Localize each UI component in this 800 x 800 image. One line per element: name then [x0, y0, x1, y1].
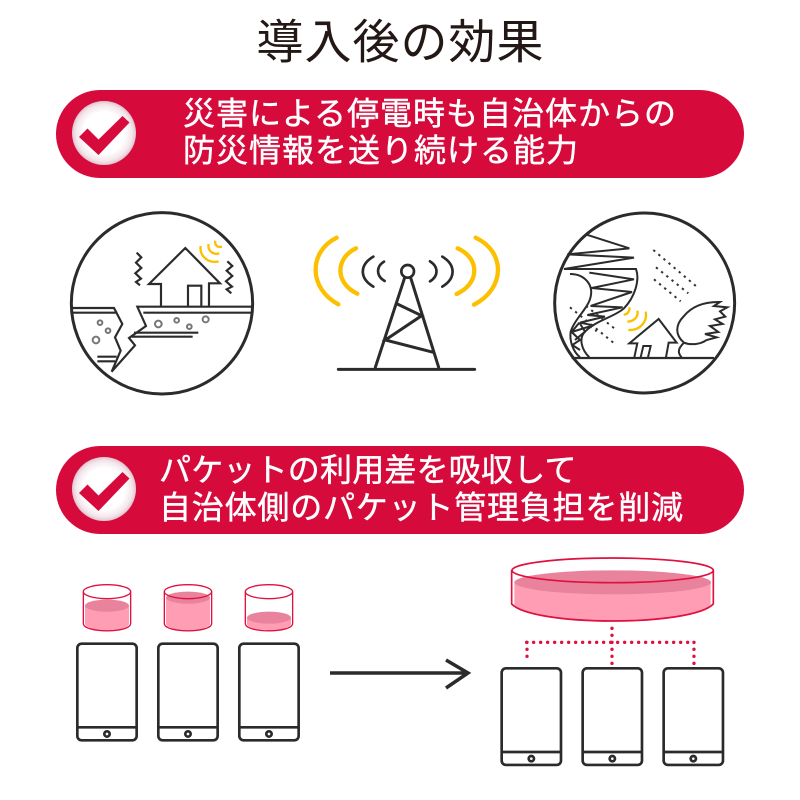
banner text: パケットの利用差を吸収して [159, 452, 577, 488]
data cylinder 2 [164, 585, 212, 631]
banner: disaster resilience [56, 90, 744, 178]
banner text: 災害による停電時も自治体からの [183, 96, 677, 132]
shared data pool with tablets [502, 558, 723, 765]
icon: earthquake circle [71, 213, 253, 394]
tablet 1 [502, 668, 561, 765]
individual tablets with separate data [77, 585, 299, 740]
tablet 3 [664, 668, 723, 765]
arrow [330, 660, 468, 688]
dotted connectors [527, 628, 694, 667]
tablet 2 [158, 644, 218, 740]
title: 導入後の効果 [256, 16, 544, 68]
banner text: 自治体側のパケット管理負担を削減 [159, 490, 684, 526]
data cylinder 3 [245, 585, 293, 631]
data cylinder 1 [83, 585, 131, 631]
icon: typhoon circle [555, 213, 735, 393]
tablet 3 [239, 644, 299, 740]
banner: packet pooling [56, 446, 744, 534]
icon: check mark [72, 101, 136, 165]
icon: check mark [72, 457, 136, 521]
icon: radio tower [316, 238, 498, 369]
banner text: 防災情報を送り続ける能力 [183, 132, 579, 168]
tablet 2 [583, 668, 642, 765]
shared data cylinder [512, 558, 713, 621]
tablet 1 [77, 644, 137, 740]
